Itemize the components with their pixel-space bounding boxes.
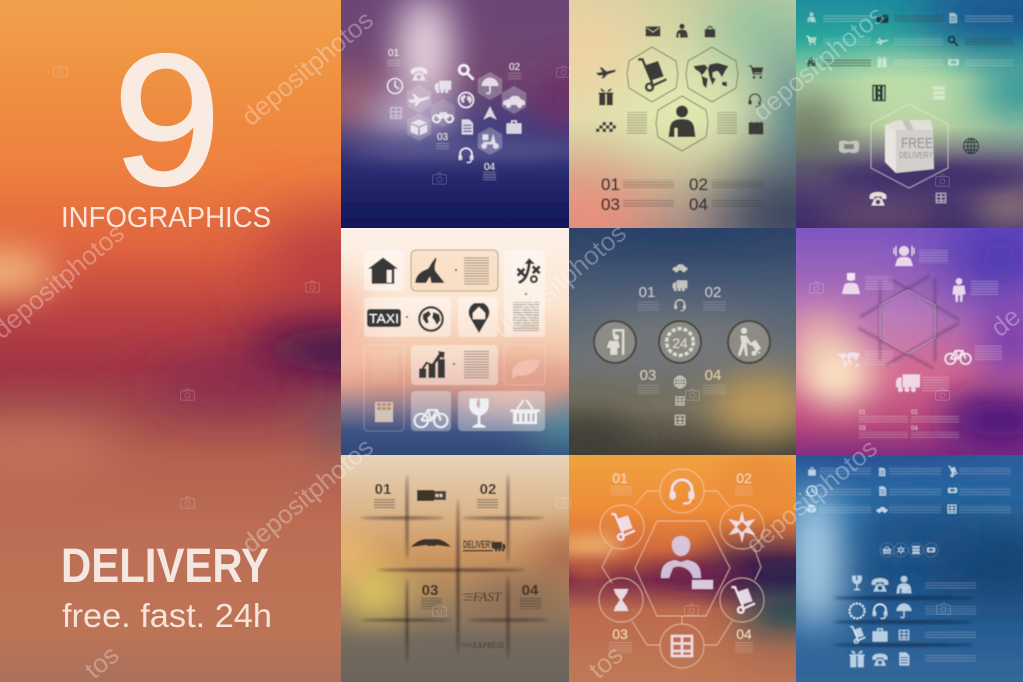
icon: scooter <box>481 134 499 149</box>
text rows top <box>819 468 1011 513</box>
icon: headset <box>458 148 474 162</box>
card: road <box>411 250 498 291</box>
dot <box>406 316 408 318</box>
icon: house <box>368 258 398 284</box>
watermark camera marks <box>54 66 950 616</box>
panel 7: folded grid <box>320 451 604 682</box>
text row 1 <box>823 15 871 23</box>
hexagon tile <box>407 85 431 113</box>
text block <box>483 172 496 180</box>
text block left <box>627 112 647 135</box>
caption 03 <box>638 384 659 395</box>
number 03: 03 <box>601 195 620 214</box>
number 01: 01 <box>375 481 391 498</box>
text rows bottom <box>925 581 976 662</box>
icon: basket <box>882 546 892 554</box>
icon: telephone <box>411 67 427 80</box>
icon: car <box>876 507 888 513</box>
icon: globe <box>419 307 443 331</box>
dot <box>453 363 455 365</box>
icon: shopping bag <box>705 26 715 37</box>
icon: grid sign <box>671 635 693 657</box>
icon: umbrella <box>482 78 498 94</box>
caption 03 <box>623 200 674 208</box>
label 01: 01 <box>859 410 866 416</box>
icon: world map <box>694 63 728 88</box>
panel 6: star hexagon <box>790 220 1023 459</box>
icon: courier <box>676 24 688 38</box>
fast logo: FAST <box>472 589 502 604</box>
icon: navigation arrow <box>483 106 497 120</box>
panel 2: hexagon worker diagram <box>569 0 796 228</box>
number 02: 02 <box>736 470 752 486</box>
card: wallet <box>364 345 404 431</box>
icon: worker <box>896 576 912 593</box>
number 01: 01 <box>601 175 620 194</box>
hexagon frame: world map <box>686 47 738 102</box>
hexagon tile <box>502 86 526 114</box>
panel 9: blue rows <box>750 449 1023 682</box>
text row 2 dark <box>965 37 1013 45</box>
icon: box <box>675 415 685 425</box>
number 03: 03 <box>422 582 438 599</box>
number 04: 04 <box>522 582 539 599</box>
number 04: 04 <box>705 367 721 384</box>
icon: cart <box>612 514 635 540</box>
text block right <box>717 112 737 135</box>
icon: basket <box>510 400 540 424</box>
icon: free delivery box <box>885 120 934 173</box>
number 03: 03 <box>640 367 656 384</box>
icon: grid <box>948 504 956 514</box>
heading: delivery: DELIVERY <box>61 540 269 593</box>
icon: headset <box>674 300 686 311</box>
dot <box>525 293 527 295</box>
caption 03 <box>859 432 908 439</box>
card: tactics <box>504 250 545 337</box>
card: chart <box>411 345 498 385</box>
text row 1 <box>965 15 1013 23</box>
icon: 24 hour ring <box>667 329 693 355</box>
dot <box>455 269 457 271</box>
number 03: 03 <box>612 626 628 642</box>
card: bike <box>411 391 451 431</box>
icon: bag <box>808 467 816 476</box>
icon: truck <box>896 374 920 392</box>
mid row rings <box>880 543 938 557</box>
caption 03 <box>421 598 442 609</box>
caption 03 <box>609 642 632 653</box>
icon: headset <box>748 94 762 107</box>
icon: broken glass <box>852 576 862 590</box>
label 03: 03 <box>859 426 866 432</box>
icon: radio person <box>894 246 914 266</box>
watermark text: depositphotos <box>489 218 632 345</box>
icon: phone <box>879 486 886 496</box>
caption 02 <box>712 180 763 188</box>
caption 02 <box>703 301 726 312</box>
circle: compass <box>720 505 764 549</box>
icon: 24 hour phone <box>462 120 473 134</box>
icon: taxi sign: TAXI <box>369 311 399 326</box>
icon: courier <box>807 12 816 22</box>
icon: search <box>459 65 474 80</box>
icon: motorcycle <box>433 112 453 122</box>
row shadows <box>833 596 973 646</box>
circle: trolley <box>600 505 644 549</box>
icon: phone <box>870 192 886 206</box>
text row 3 dark <box>823 59 871 67</box>
text block wallet <box>371 351 398 384</box>
icon: list <box>912 546 920 554</box>
fold shadows <box>360 474 548 662</box>
icon: taxi sign <box>367 309 401 327</box>
card: pin <box>458 297 498 337</box>
label 03: 03 <box>437 132 449 143</box>
icon: walker with trolley <box>738 328 760 356</box>
delivery truck logo: DELIVERY <box>463 539 494 551</box>
icon: trolley <box>948 466 958 477</box>
icon: worker with box <box>668 106 696 137</box>
circle: headset <box>660 469 704 513</box>
hexagon outline <box>871 104 948 188</box>
icon: car <box>673 264 687 272</box>
icon: feather wing <box>512 360 540 379</box>
label 04: 04 <box>911 426 918 432</box>
icon: gift <box>598 89 614 105</box>
caption 02 <box>911 416 959 423</box>
icon: woman <box>842 273 860 294</box>
icon: list <box>933 86 945 100</box>
icon: 24 hour ring: 24 <box>672 335 688 351</box>
icon: plane <box>408 94 430 106</box>
label 02: 02 <box>911 410 918 416</box>
caption 04 <box>735 642 753 653</box>
icon: trolley <box>850 627 865 643</box>
icon: ticket <box>877 15 888 23</box>
text block <box>865 350 893 365</box>
number 02: 02 <box>480 481 496 498</box>
hexagon tile <box>478 72 502 100</box>
text block <box>387 59 400 66</box>
icon: plane <box>596 67 616 78</box>
icon: hand truck <box>638 59 667 91</box>
caption 04 <box>712 200 763 208</box>
caption 02 <box>477 498 498 508</box>
icon: document <box>899 652 909 666</box>
icon: gift <box>850 651 864 667</box>
icon: crate <box>749 121 763 134</box>
watermark text: depositphotos <box>747 0 890 127</box>
icon: road <box>872 85 886 101</box>
caption 01 <box>638 301 659 312</box>
icon: calendar <box>676 396 684 406</box>
circle: hand truck <box>720 578 764 622</box>
icon: forklift <box>673 280 687 291</box>
icon: location pin <box>469 302 489 333</box>
panel 8: circled icons with driver <box>558 451 855 682</box>
number 01: 01 <box>612 470 628 486</box>
icon: handshake <box>839 141 859 153</box>
text block <box>865 276 893 291</box>
label 02: 02 <box>509 62 521 73</box>
big number 9: 9 <box>113 17 221 224</box>
caption 01 <box>374 498 395 508</box>
central hexagon <box>635 521 730 616</box>
circle: door delivery <box>594 321 636 363</box>
text row 2 <box>894 37 943 45</box>
panel: cover background <box>0 0 341 682</box>
icon: bicycle courier <box>414 410 448 427</box>
label 04: 04 <box>484 162 496 173</box>
icon: cart <box>749 66 763 79</box>
text row 3 <box>965 59 1013 67</box>
icon: document <box>879 468 885 476</box>
number 04: 04 <box>689 195 708 214</box>
icon: grid <box>936 193 946 203</box>
icon: phone <box>872 578 888 592</box>
icon: road <box>415 258 445 283</box>
icon: lock <box>807 57 816 67</box>
icon: taxi checks <box>596 122 616 132</box>
icon: phone <box>872 654 888 666</box>
watermark text: depositphotos <box>740 433 883 560</box>
number 02: 02 <box>689 175 708 194</box>
caption 04 <box>520 598 541 609</box>
number 01: 01 <box>639 284 655 301</box>
icon: people <box>927 547 935 553</box>
icon: suitcase <box>506 120 522 134</box>
icon: winged envelope <box>411 539 451 547</box>
icon: hand truck <box>732 587 755 613</box>
caption 04 <box>703 384 726 395</box>
icon: taxi driver <box>661 536 713 589</box>
text block <box>508 72 521 80</box>
watermark text: depositphotos <box>236 432 379 559</box>
icon: car <box>503 96 525 108</box>
circle: walker with trolley <box>728 321 770 363</box>
text block <box>919 250 948 263</box>
icon: cart <box>806 36 817 45</box>
text block <box>975 345 1002 360</box>
heading: infographics: INFOGRAPHICS <box>61 202 271 234</box>
icon: wallet <box>375 402 393 422</box>
icon: tactics <box>518 258 540 283</box>
icon: envelope <box>646 26 660 36</box>
icon: broken glass <box>469 398 489 428</box>
icon: suitcase <box>872 628 888 642</box>
icon: box <box>807 504 816 513</box>
icon: clock <box>807 486 817 496</box>
hexagon star shadows <box>858 276 959 368</box>
icon: headset <box>872 604 888 618</box>
icon: globe <box>964 138 978 154</box>
panel 3: free delivery hexagon <box>770 0 1023 232</box>
icon: umbrella <box>896 604 912 618</box>
icon: dashed ring <box>850 604 864 618</box>
icon: world map <box>838 352 860 368</box>
caption 01 <box>623 180 674 188</box>
icon: truck <box>435 81 451 93</box>
text block <box>922 376 949 391</box>
text block <box>971 281 998 296</box>
icon: globe <box>674 376 686 388</box>
outer hexagon segments <box>602 491 761 645</box>
card: taxi <box>364 297 451 337</box>
icon: phone device <box>950 13 957 23</box>
icon: door delivery <box>607 329 624 355</box>
icon: free delivery box: FREE <box>901 135 933 152</box>
card: house <box>364 250 404 291</box>
icon: growth chart <box>419 351 445 378</box>
text block tactics <box>513 302 539 331</box>
icon: man <box>952 278 966 302</box>
number 04: 04 <box>736 626 752 642</box>
watermark text: depositphotos <box>236 5 379 132</box>
icon: headset <box>670 480 694 504</box>
text row 2 <box>823 37 871 45</box>
text block road <box>464 256 489 285</box>
icon: bicycle <box>945 351 971 364</box>
text block chart <box>464 350 489 379</box>
hexagon tile <box>478 127 502 155</box>
panel 4: rounded cards <box>316 224 614 459</box>
icon: plane <box>897 545 905 555</box>
icon: globe <box>458 92 474 108</box>
text row 1 dark <box>894 15 943 23</box>
circle: taxi sign <box>660 624 704 668</box>
hexagon frame: worker <box>656 96 708 151</box>
icon: grid <box>899 630 909 640</box>
text block <box>436 142 449 149</box>
card: feather <box>504 345 545 385</box>
icon: search <box>948 36 958 46</box>
circle: 24 hours <box>659 321 701 363</box>
text row 3 <box>894 59 943 67</box>
caption 01 <box>610 485 632 495</box>
icon: hands <box>948 59 959 66</box>
hexagon tile <box>431 99 455 127</box>
hexagon dashed outline <box>880 290 935 354</box>
icon: hands <box>948 488 957 493</box>
subheading: free fast 24h: free. fast. 24h <box>62 597 272 634</box>
icon: toll gate <box>390 107 402 119</box>
number 02: 02 <box>705 284 721 301</box>
icon: ticket <box>417 490 446 501</box>
hexagon tile <box>407 113 431 141</box>
express logo <box>460 641 504 650</box>
caption 02 <box>735 485 753 495</box>
caption 01 <box>859 416 908 423</box>
circle: hourglass <box>599 578 643 622</box>
caption 04 <box>911 432 959 439</box>
panel 5: three circles <box>535 224 810 465</box>
icon: hourglass <box>614 589 628 611</box>
hexagon frame: hand truck <box>627 47 678 102</box>
label 01: 01 <box>388 48 400 59</box>
express logo: EXPRESS <box>472 641 504 650</box>
icon: compass <box>729 511 755 543</box>
icon: free delivery box: DELIVERY <box>899 151 934 160</box>
icon: clock <box>388 78 402 94</box>
panel 1: hexagon icon cluster <box>341 0 569 228</box>
icon: bag <box>877 56 887 68</box>
icon: parcel <box>411 120 427 135</box>
icon: plane <box>876 38 888 45</box>
card: glass and basket <box>458 391 545 431</box>
